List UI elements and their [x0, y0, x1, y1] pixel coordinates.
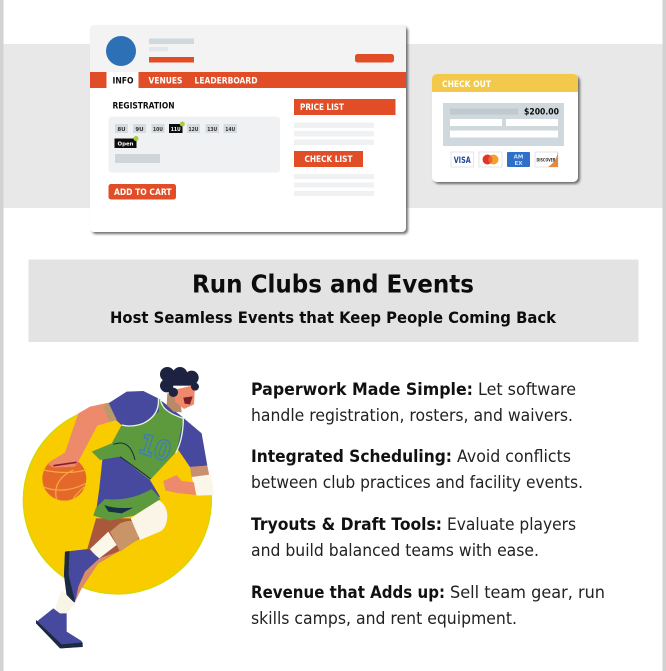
- upper body and shirt: [92, 391, 207, 480]
- age group selector: [108, 116, 280, 172]
- header button: [355, 54, 394, 62]
- title banner: [28, 260, 638, 342]
- checkout heading: CHECK OUT: [442, 80, 491, 90]
- feature: paperwork made simple: Let software: [478, 380, 576, 399]
- feature: tryouts and draft tools: Evaluate players: [447, 515, 576, 534]
- feature: revenue that adds up: Revenue that Adds up:: [251, 583, 445, 602]
- icon: visa: VISA: [454, 156, 471, 166]
- price list: PRICE LIST: [300, 103, 344, 113]
- title: Run Clubs and Events: [192, 270, 474, 298]
- arms and hand: [47, 403, 214, 496]
- icon: american express: AM: [514, 154, 523, 160]
- button: add to cart: ADD TO CART: [114, 188, 172, 198]
- navigation bar: [90, 72, 406, 88]
- price list: [294, 99, 396, 145]
- profile placeholder lines: [149, 38, 194, 62]
- navigation bar: INFO: [112, 76, 134, 86]
- age group selector: 10U: [153, 127, 163, 133]
- icon: mastercard: [479, 152, 502, 167]
- feature: revenue that adds up: [251, 583, 605, 628]
- yellow circle: [23, 406, 211, 594]
- age group selector: 8U: [117, 127, 126, 133]
- feature: tryouts and draft tools: Tryouts & Draft Tools:: [251, 515, 442, 534]
- panel: checkout card: [432, 74, 578, 182]
- age group selector: 9U: [135, 127, 144, 133]
- icon: american express: EX: [514, 161, 523, 167]
- feature: paperwork made simple: Paperwork Made Simple:: [251, 380, 473, 399]
- icon: club avatar: [106, 36, 136, 66]
- subtitle: Host Seamless Events that Keep People Coming Back: [110, 308, 556, 327]
- feature: integrated scheduling: between club practices and facility events.: [251, 473, 583, 492]
- feature: revenue that adds up: Sell team gear, run: [450, 583, 605, 602]
- payment form: [443, 103, 564, 146]
- icon: visa: [451, 152, 474, 167]
- check list: [294, 151, 374, 196]
- head and hair: [160, 367, 199, 412]
- button: add to cart: [108, 184, 176, 200]
- basketball: [42, 457, 86, 501]
- feature: tryouts and draft tools: and build balanced teams with ease.: [251, 541, 539, 560]
- legs and shoes: [36, 500, 167, 648]
- check list: CHECK LIST: [304, 155, 353, 165]
- feature: integrated scheduling: Integrated Scheduling:: [251, 447, 452, 466]
- feature: paperwork made simple: handle registration, rosters, and waivers.: [251, 406, 573, 425]
- age group selector: Open: [118, 142, 134, 148]
- age group selector: 11U: [171, 127, 181, 133]
- age group selector: 14U: [225, 127, 235, 133]
- icon: discover: [535, 152, 558, 167]
- payment form: $200.00: [524, 108, 559, 118]
- navigation bar: LEADERBOARD: [194, 76, 258, 86]
- icon: discover: DISCOVER: [536, 158, 556, 164]
- icon: american express: [507, 152, 530, 167]
- upper body and shirt: 10: [135, 429, 174, 468]
- feature: integrated scheduling: [251, 447, 583, 492]
- shorts: [93, 457, 161, 521]
- heading: registration: REGISTRATION: [112, 102, 174, 112]
- age group selector: 12U: [188, 127, 198, 133]
- feature: tryouts and draft tools: [251, 515, 576, 560]
- illustration: basketball player: [23, 367, 214, 648]
- panel: registration page mockup: [90, 25, 406, 232]
- feature: paperwork made simple: [251, 380, 576, 425]
- feature: integrated scheduling: Avoid conflicts: [457, 447, 571, 466]
- feature: revenue that adds up: skills camps, and rent equipment.: [251, 609, 517, 628]
- age group selector: 13U: [207, 127, 217, 133]
- navigation bar: VENUES: [148, 76, 182, 86]
